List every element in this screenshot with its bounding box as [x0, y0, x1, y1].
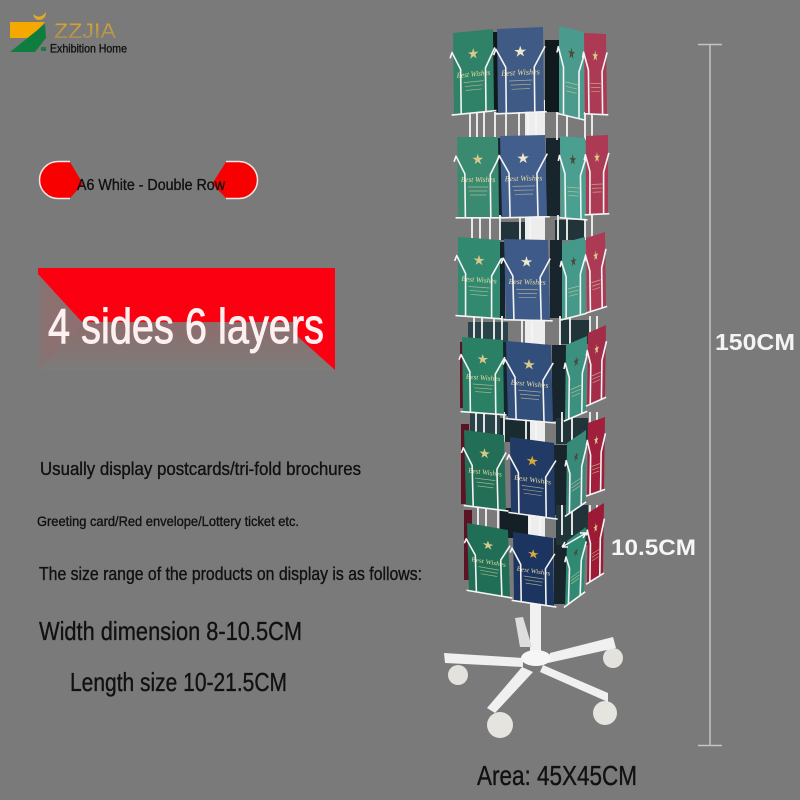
- red pill label: A6 White - Double Row: A6 White - Double Row: [77, 177, 225, 194]
- row 4 cards: Best Wishes: [511, 378, 549, 390]
- text: width dimension: Width dimension 8-10.5CM: [39, 616, 302, 646]
- row 1 cards: Best Wishes: [457, 68, 490, 80]
- arrow: pocket width: [562, 533, 586, 547]
- display rack: [444, 26, 623, 738]
- row 2 cards: Best Wishes: [505, 174, 543, 183]
- row 6 cards: Best Wishes: [471, 556, 506, 569]
- row 5 cards: [461, 417, 606, 519]
- row 2 cards: [454, 135, 609, 220]
- text: area: Area: 45X45CM: [477, 760, 637, 791]
- row 6 cards: Best Wishes: [517, 565, 551, 577]
- label: 150CM: 150CM: [715, 329, 795, 355]
- banner: 4 sides 6 layers: [33, 268, 335, 370]
- row 2 cards: Best Wishes: [461, 175, 495, 184]
- row 4 cards: Best Wishes: [466, 372, 500, 383]
- logo: ZZJIA Exhibition Home: [10, 12, 127, 56]
- rack base with casters: [444, 600, 623, 738]
- logo: ZZJIA Exhibition Home: ZZJIA: [54, 20, 116, 43]
- row 6 cards: [464, 502, 605, 608]
- row 1 cards: Best Wishes: [501, 68, 540, 78]
- text: greeting cards: Greeting card/Red envelope/Lottery ticket etc.: [37, 513, 299, 529]
- row 1 cards: [450, 26, 608, 120]
- label: 10.5CM: 10.5CM: [611, 535, 696, 560]
- central column and rods: [460, 32, 597, 604]
- text: usually display: Usually display postcards/tri-fold brochures: [40, 459, 361, 479]
- row 4 cards: [459, 325, 607, 423]
- row 5 cards: Best Wishes: [514, 473, 551, 486]
- row 3 cards: Best Wishes: [508, 277, 546, 287]
- text: size range intro: The size range of the products on display is as follows:: [39, 564, 422, 584]
- red pill label: A6 White - Double Row: [40, 162, 258, 198]
- logo: ZZJIA Exhibition Home: Exhibition Home: [50, 42, 127, 56]
- row 3 cards: [455, 232, 607, 321]
- row 3 cards: Best Wishes: [461, 274, 497, 285]
- banner: 4 sides 6 layers: 4 sides 6 layers: [48, 300, 324, 354]
- dimension line: height: [698, 44, 795, 746]
- row 5 cards: Best Wishes: [468, 466, 502, 479]
- text: length size: Length size 10-21.5CM: [70, 667, 287, 697]
